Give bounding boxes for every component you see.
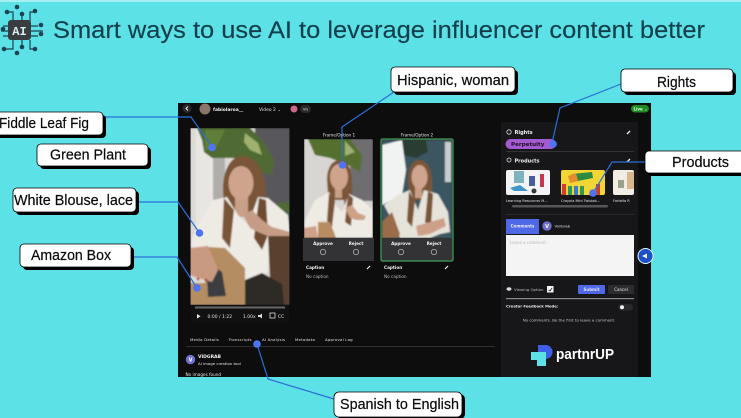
frame option 1: Caption bbox=[306, 265, 324, 270]
title: Smart ways to use AI to leverage influencer content better bbox=[53, 17, 705, 44]
logo: partnrUP: partnrUP bbox=[556, 346, 614, 363]
product thumbnail: fortella bbox=[613, 170, 634, 195]
label: Products bbox=[645, 151, 741, 176]
app top bar: VG bbox=[303, 108, 308, 112]
frame option 1: Approve bbox=[313, 241, 333, 246]
vidgrab section bbox=[186, 354, 241, 377]
frame option 1: Reject bbox=[349, 241, 363, 246]
callout: amazon box connector bbox=[131, 257, 201, 292]
frame option 2: Caption bbox=[384, 265, 402, 270]
frame option 1 bbox=[303, 132, 374, 279]
tabs row: Metadata bbox=[295, 337, 315, 342]
products section bbox=[506, 158, 634, 215]
label: White Blouse, lace bbox=[13, 188, 139, 215]
comments tabs: V bbox=[545, 224, 549, 230]
label: White Blouse, lace: White Blouse, lace bbox=[14, 192, 133, 209]
frame option 2: Approve bbox=[391, 241, 411, 246]
frame option 2: No caption bbox=[384, 274, 407, 279]
products section: Fortella R bbox=[613, 199, 630, 203]
creator feedback mode bbox=[506, 304, 633, 322]
video controls bbox=[191, 305, 289, 323]
rights section bbox=[506, 130, 634, 152]
app top bar: fabiolaroa__ bbox=[213, 107, 244, 113]
viewing option and buttons bbox=[506, 285, 634, 299]
rights section: Rights bbox=[514, 130, 533, 136]
label: Amazon Box bbox=[20, 244, 134, 270]
frame option 2 bbox=[381, 132, 453, 279]
frame option 2: Frame/Option 2 bbox=[401, 132, 434, 138]
frame option 2: Reject bbox=[427, 241, 441, 246]
label: Spanish to English: Spanish to English bbox=[340, 396, 459, 413]
products section: Learning Resources M... bbox=[506, 199, 548, 203]
label: Green Plant: Green Plant bbox=[50, 146, 127, 164]
callout: rights connector bbox=[549, 84, 621, 148]
tabs row: Approval Log bbox=[325, 337, 353, 342]
callout: products connector bbox=[589, 162, 645, 197]
viewing option and buttons: Cancel bbox=[614, 287, 628, 292]
callout: hispanic woman connector bbox=[339, 92, 394, 169]
products section: Crayola Mini Twistab... bbox=[561, 199, 600, 203]
label: Green Plant bbox=[37, 144, 151, 169]
vidgrab section: V bbox=[189, 358, 193, 364]
label: Rights bbox=[621, 69, 736, 95]
panel: rights, products and comments sidebar bbox=[501, 122, 638, 377]
tabs row: AI Analysis bbox=[262, 337, 285, 342]
comments tabs: VidGrab bbox=[554, 224, 571, 228]
product thumbnail: crayola bbox=[561, 170, 605, 195]
frame option 1: No caption bbox=[306, 274, 329, 279]
comments tabs: Comments bbox=[511, 224, 535, 228]
tabs row bbox=[186, 337, 495, 347]
vidgrab section: No images found bbox=[186, 372, 221, 377]
app top bar: Video 2 ⌄ bbox=[259, 107, 281, 113]
viewing option and buttons: Viewing Option bbox=[514, 287, 544, 292]
rights section: Perpetuity bbox=[511, 142, 545, 148]
video controls: CC bbox=[278, 314, 284, 320]
icon: AI circuit chip bbox=[1, 5, 43, 55]
label: Fiddle Leaf Fig bbox=[0, 112, 106, 138]
live badge: Live ⌄ bbox=[634, 106, 647, 112]
products section: Products bbox=[514, 158, 540, 164]
live badge bbox=[631, 105, 649, 112]
creator feedback mode: Creator Feedback Mode: bbox=[506, 304, 559, 308]
comment text box: Leave a comment... bbox=[510, 240, 550, 245]
video controls: 1.00x bbox=[243, 314, 256, 320]
label: Amazon Box: Amazon Box bbox=[31, 247, 111, 264]
app top bar bbox=[182, 104, 311, 114]
label: Products: Products bbox=[672, 154, 729, 171]
comments tabs bbox=[506, 219, 571, 234]
callout: spanish to english connector bbox=[253, 340, 334, 399]
video controls: 0:00 / 1:22 bbox=[208, 314, 232, 320]
label: Hispanic, woman bbox=[391, 67, 518, 95]
creator feedback mode: No comments. Be the first to leave a comment. bbox=[523, 318, 615, 322]
label: Spanish to English bbox=[334, 392, 465, 418]
icon: floating help button bbox=[638, 248, 653, 264]
panel: app screenshot bbox=[178, 103, 651, 377]
label: Hispanic, woman: Hispanic, woman bbox=[397, 72, 509, 89]
label: Fiddle Leaf Fig: Fiddle Leaf Fig bbox=[0, 115, 89, 132]
label: Rights: Rights bbox=[657, 74, 696, 91]
comment text box bbox=[506, 235, 634, 276]
frame option 1: Frame/Option 1 bbox=[323, 132, 356, 138]
vidgrab section: VIDGRAB bbox=[198, 354, 222, 360]
callout: white blouse connector bbox=[136, 202, 203, 237]
viewing option and buttons: Submit bbox=[583, 287, 600, 292]
callout: fiddle leaf fig connector bbox=[103, 117, 216, 151]
tabs row: Transcripts bbox=[228, 337, 252, 342]
vidgrab section: AI image creation tool bbox=[198, 361, 241, 366]
main video photo bbox=[190, 128, 290, 305]
product thumbnail: learning resources bbox=[506, 170, 550, 195]
logo: partnrUP bbox=[531, 345, 614, 366]
tabs row: Media Details bbox=[190, 337, 219, 342]
icon: AI circuit chip: AI bbox=[12, 25, 27, 39]
